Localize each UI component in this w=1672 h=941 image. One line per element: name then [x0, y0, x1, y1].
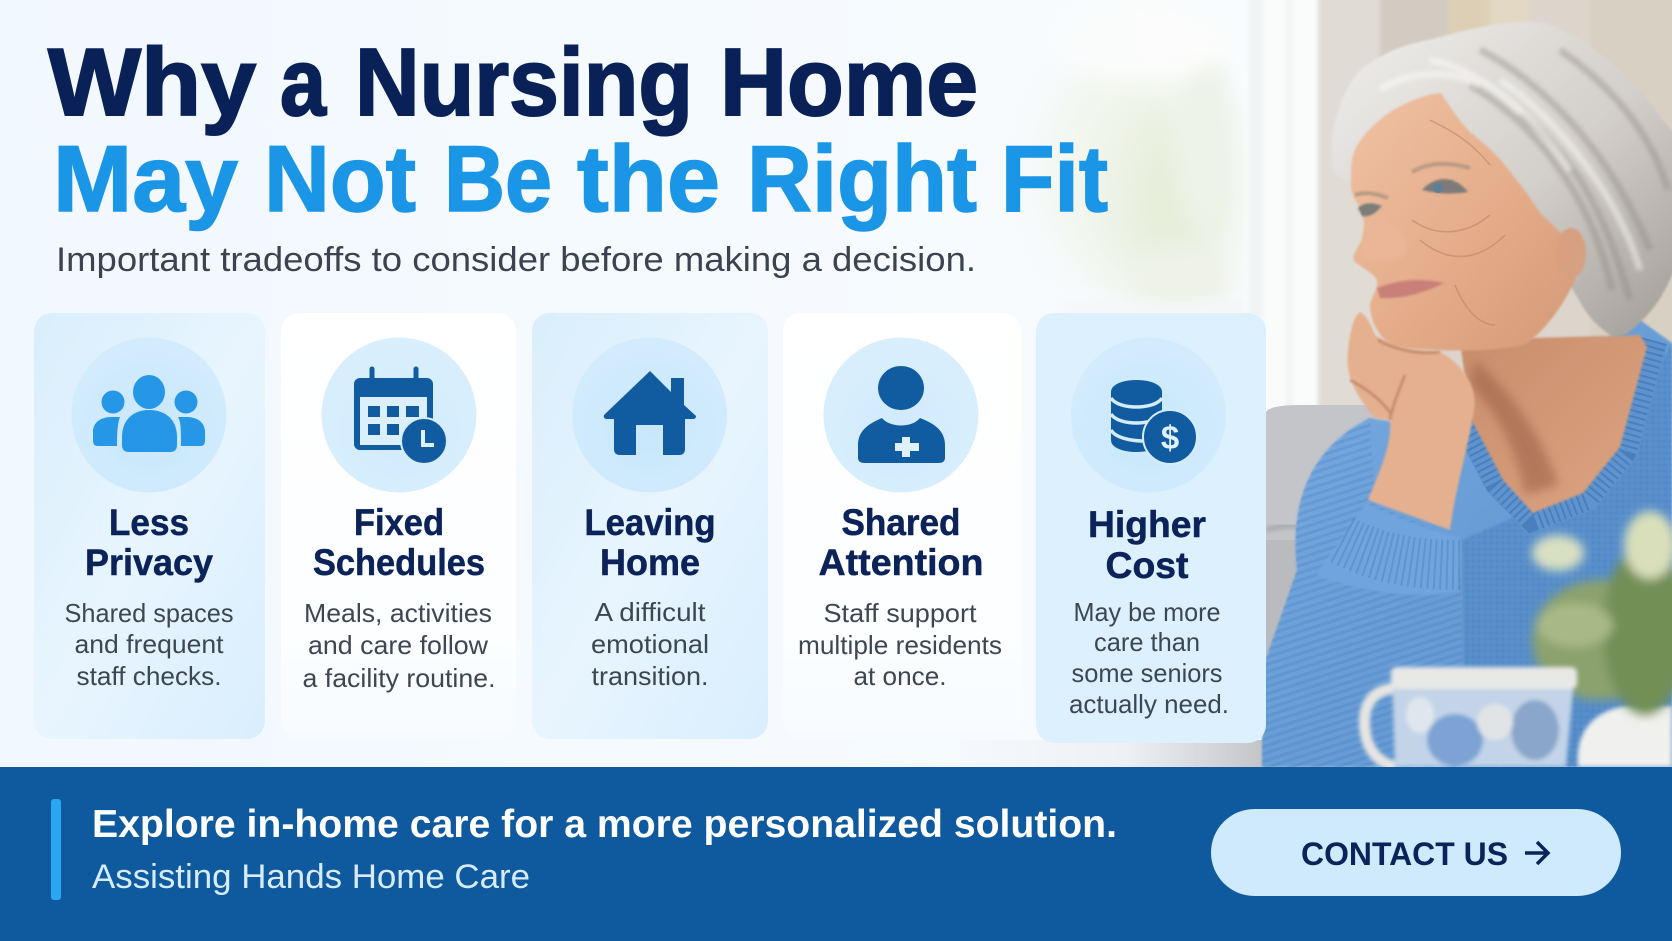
wrinkles: [1412, 120, 1505, 325]
heading: Less: [109, 502, 189, 543]
wall and curtain: [1318, 0, 1672, 415]
heading: Leaving: [584, 502, 716, 543]
title: Fit: [1001, 126, 1108, 231]
torso knit texture: [1462, 343, 1672, 767]
neck and chest: [1460, 335, 1647, 513]
plant pot: [1578, 706, 1672, 767]
icon: arrow: [1525, 842, 1548, 864]
description: multiple residents: [798, 630, 1002, 660]
heading: Attention: [818, 542, 984, 583]
heading: Schedules: [313, 542, 485, 583]
cuff ribbing: [1342, 540, 1460, 565]
heading: Privacy: [85, 542, 213, 583]
hair: [1332, 22, 1672, 337]
description: actually need.: [1069, 689, 1229, 719]
title: Not: [264, 126, 416, 231]
lips: [1377, 280, 1444, 298]
panel: higher cost: [1036, 313, 1266, 743]
title: [48, 29, 1108, 231]
heading: Fixed: [354, 502, 444, 543]
neck shadow: [1470, 360, 1558, 495]
heading: Cost: [1106, 545, 1188, 586]
window frame: [1245, 0, 1320, 410]
description: care than: [1094, 627, 1200, 657]
icon: coin stack and dollar coin: $: [1161, 419, 1179, 456]
description: and care follow: [308, 630, 488, 660]
photo: older woman looking out the window: [1262, 22, 1672, 767]
banner brand line: Assisting Hands Home Care: [92, 858, 530, 896]
panel: leaving home: [532, 313, 768, 739]
sofa: [1266, 405, 1390, 767]
knuckle shading: [1350, 340, 1440, 420]
subtitle: Important tradeoffs to consider before making a decision.: [56, 241, 976, 279]
panel: less privacy: [34, 313, 265, 739]
title: Home: [720, 29, 978, 136]
collar: [1465, 340, 1652, 516]
description: and frequent: [74, 629, 224, 659]
title: Be: [444, 126, 552, 231]
title: the: [577, 126, 720, 231]
description: Shared spaces: [64, 598, 234, 628]
title: Right: [747, 126, 977, 231]
title: May: [53, 126, 238, 231]
call-to-action banner: [0, 767, 1672, 941]
panel: fixed schedules: [281, 313, 516, 739]
eyes and brows: [1422, 179, 1468, 194]
title: a: [280, 29, 327, 136]
sweater cuff: [1316, 503, 1461, 595]
heading: Higher: [1088, 504, 1206, 545]
icon: group of people: [93, 375, 205, 452]
description: staff checks.: [76, 661, 222, 691]
sleeve rib texture: [1262, 418, 1465, 767]
title: Nursing: [355, 29, 693, 136]
description: a facility routine.: [302, 663, 496, 693]
heading: Shared: [842, 502, 960, 543]
sweater: [1262, 320, 1672, 767]
tea cup: [1364, 667, 1577, 767]
nose: [1362, 215, 1407, 260]
face: [1351, 93, 1575, 351]
plant leaves: [1532, 511, 1672, 715]
icon: calendar with clock: [354, 369, 447, 464]
icon: care staff person: [858, 366, 945, 463]
description: May be more: [1074, 597, 1220, 627]
icon: coin stack and dollar coin: [1111, 380, 1197, 464]
ear: [1556, 228, 1586, 278]
hand supporting chin: [1347, 312, 1475, 530]
icon: house: [604, 371, 696, 455]
title: Why: [48, 29, 256, 136]
description: transition.: [592, 661, 708, 691]
accent bar: [51, 799, 61, 900]
description: A difficult: [594, 597, 706, 627]
panel: shared attention: [783, 313, 1021, 739]
description: emotional: [591, 629, 709, 659]
banner headline: Explore in-home care for a more personalized solution.: [92, 803, 1117, 846]
contact button: CONTACT US: [1301, 836, 1508, 872]
hair strands: [1470, 50, 1668, 300]
description: some seniors: [1072, 658, 1222, 688]
description: Meals, activities: [304, 598, 492, 628]
description: at once.: [854, 661, 946, 691]
description: Staff support: [824, 598, 977, 628]
heading: Home: [600, 542, 700, 583]
contact button: [1211, 809, 1621, 896]
